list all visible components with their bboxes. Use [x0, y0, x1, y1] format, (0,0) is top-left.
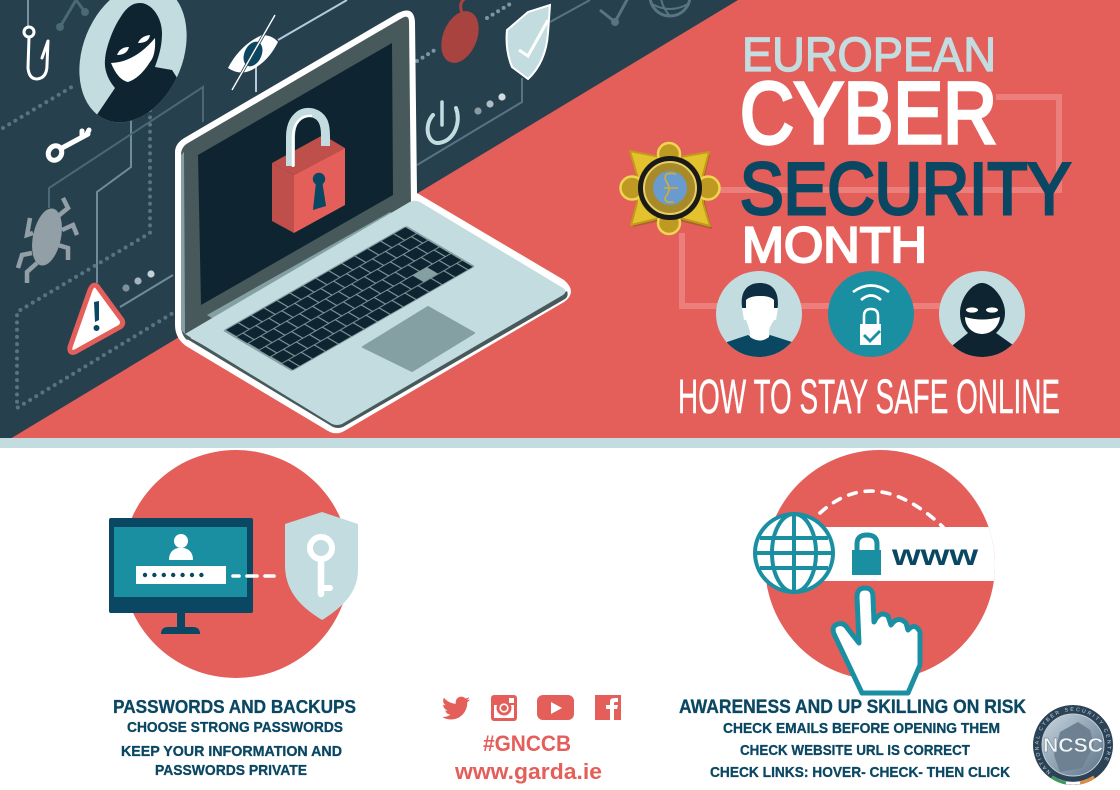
icon: warning triangle [70, 285, 123, 352]
icon: pointing hand [833, 588, 920, 693]
line: check links: CHECK LINKS: HOVER- CHECK- THEN CLICK [710, 765, 1010, 781]
trackpad [363, 307, 474, 371]
line: choose strong passwords: CHOOSE STRONG PASSWORDS [127, 720, 343, 736]
monitor [109, 518, 253, 634]
social icons [442, 695, 621, 721]
faint circuit behind title [682, 97, 1059, 306]
hashtag: #GNCCB [483, 731, 571, 756]
laptop white outline [175, 10, 571, 433]
icon: fishing hook [24, 27, 48, 79]
line: passwords private: PASSWORDS PRIVATE [155, 763, 307, 779]
icon: person circle [716, 271, 802, 362]
heading: awareness: AWARENESS AND UP SKILLING ON RISK [679, 697, 1026, 718]
circuit traces [3, 0, 690, 408]
text block: awareness and up skilling [679, 697, 1026, 781]
padlock [272, 112, 345, 233]
icon: bug [18, 198, 77, 283]
icon: youtube [537, 695, 574, 720]
icon: red bomb [434, 0, 486, 68]
title line: European: EUROPEAN [742, 29, 996, 82]
line: check emails: CHECK EMAILS BEFORE OPENING THEM [723, 721, 1000, 737]
title line: Cyber: CYBER [740, 65, 997, 162]
icon: twitter [442, 697, 470, 719]
laptop illustration [175, 10, 571, 433]
line: check website: CHECK WEBSITE URL IS CORRECT [740, 743, 970, 759]
address bar [824, 527, 995, 581]
laptop bezel [181, 17, 411, 340]
icon: hacker circle [939, 271, 1025, 360]
dashed connector [233, 574, 274, 578]
heading: passwords and backups: PASSWORDS AND BACKUPS [113, 697, 356, 717]
title line: Month: MONTH [742, 217, 927, 273]
icon: globe [755, 514, 833, 592]
icon: dots near warning [122, 270, 155, 292]
icon: key shield [285, 512, 358, 620]
text block: passwords and backups [113, 697, 356, 779]
laptop base [185, 201, 566, 425]
title [740, 29, 1071, 273]
icon: facebook [595, 695, 621, 720]
dashed arc [820, 491, 943, 527]
icon: power button [428, 102, 458, 143]
dark diagonal background [0, 0, 738, 445]
title line: Security: SECURITY [740, 149, 1071, 230]
garda badge [620, 143, 720, 234]
light divider strip [0, 438, 1120, 448]
NCSC badge: NCSC [1043, 735, 1103, 757]
line: keep information: KEEP YOUR INFORMATION AND [121, 744, 342, 760]
header panel [0, 0, 1120, 448]
website: www.garda.ie [454, 759, 602, 784]
icon: dots near power [474, 93, 506, 115]
icon: hacker avatar [79, 0, 187, 122]
www label: www [891, 539, 979, 572]
panel: passwords illustration [109, 450, 358, 678]
panel: awareness illustration [755, 450, 1000, 693]
icon: crossed eye [228, 15, 278, 90]
laptop screen [198, 43, 393, 305]
laptop base edge [185, 291, 568, 428]
laptop hinge [207, 212, 395, 320]
icon: instagram [491, 695, 517, 721]
keyboard [223, 226, 475, 371]
icon: check shield [507, 5, 550, 79]
NCSC badge: NATIONAL CYBER SECURITY CENTRE [1035, 707, 1112, 774]
icon: lock [852, 535, 881, 575]
icon: wifi lock circle [828, 271, 914, 357]
icon: key [46, 130, 89, 163]
